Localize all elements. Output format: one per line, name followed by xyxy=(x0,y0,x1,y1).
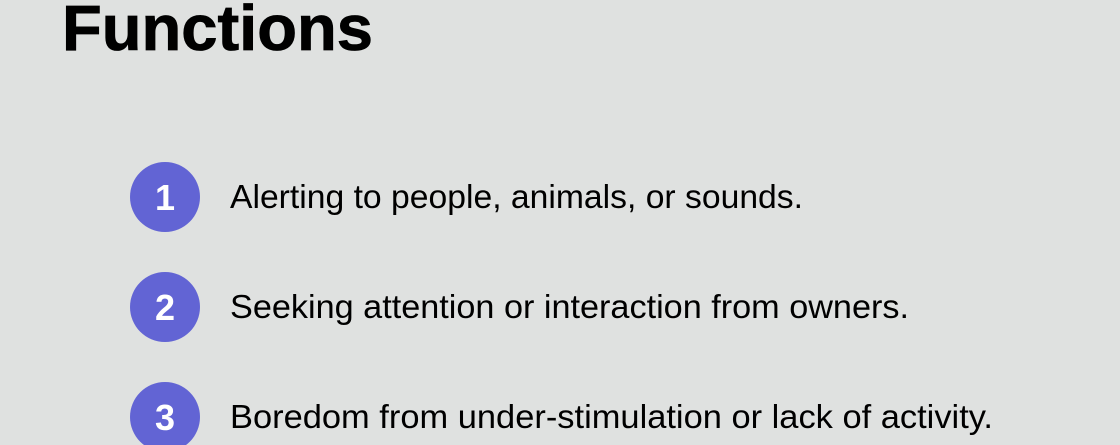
list item 3 xyxy=(130,382,993,445)
list item 2 xyxy=(130,272,909,342)
number badge 2: 2 xyxy=(155,287,175,328)
number badge 2 xyxy=(130,272,200,342)
item 1 text: Alerting to people, animals, or sounds. xyxy=(230,179,803,216)
number badge 3: 3 xyxy=(155,397,175,438)
list item 1 xyxy=(130,162,803,232)
item 2 text: Seeking attention or interaction from owners. xyxy=(230,289,909,326)
number badge 3 xyxy=(130,382,200,445)
item 3 text: Boredom from under-stimulation or lack of activity. xyxy=(230,399,993,436)
number badge 1 xyxy=(130,162,200,232)
number badge 1: 1 xyxy=(155,177,175,218)
